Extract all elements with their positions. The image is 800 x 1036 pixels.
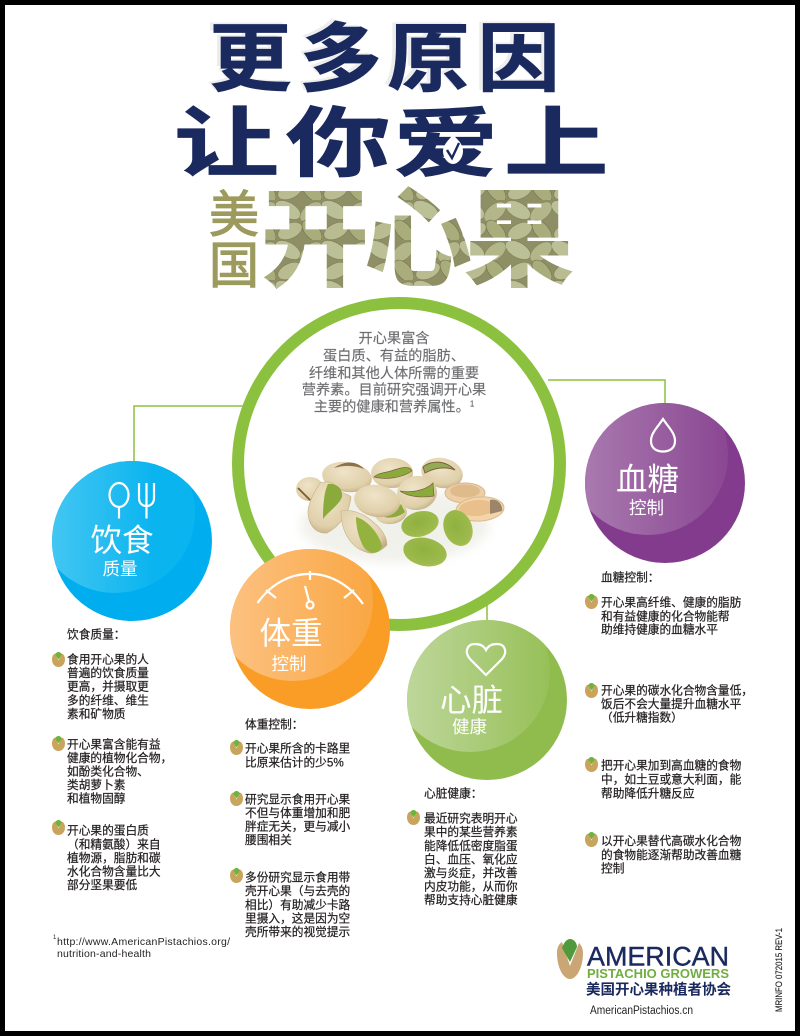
bullet item 2: [230, 791, 351, 847]
bullet item: 能降低低密度脂蛋: [424, 839, 518, 853]
bullet item 1: 和有益健康的化合物能帮: [601, 609, 730, 623]
print code: MRINFO 072015 REV-1: [774, 928, 785, 1012]
bullet item 3: 植物源，脂肪和碳: [67, 851, 161, 865]
icon: check badge on title: [443, 135, 463, 164]
shell H: [341, 510, 387, 553]
bullet item 1: 助维持健康的血糖水平: [601, 623, 718, 637]
text block: diet quality: 饮食质量：: [67, 627, 125, 641]
bullet item 1: [585, 594, 742, 637]
connector lines: [134, 380, 665, 621]
bullet item 1: 素和矿物质: [67, 707, 126, 721]
logo: American Pistachio Growers: AmericanPistachios.cn: [590, 1005, 693, 1017]
title: American: 国: [209, 238, 259, 294]
shell F: [352, 481, 402, 521]
bullet item: 最近研究表明开心: [424, 812, 518, 826]
circle: heart health: [407, 620, 567, 780]
icon: heart: [467, 644, 505, 675]
empty shell N: [455, 495, 505, 523]
bullet item 3: （和精氨酸）来自: [67, 837, 161, 851]
bullet item 4: 控制: [601, 861, 624, 875]
logo: American Pistachio Growers: 美国开心果种植者协会: [586, 980, 731, 998]
bullet item 3: 里摄入，这是因为空: [245, 911, 350, 925]
intro text: 1: [470, 400, 475, 408]
text block: heart health: [407, 786, 518, 907]
bullet item 3: 把开心果加到高血糖的食物: [601, 759, 742, 773]
footnote: [53, 935, 230, 960]
text block: diet quality: [52, 627, 172, 892]
bullet item 3: 多份研究显示食用带: [245, 871, 351, 885]
icon: spoon and fork: [110, 483, 154, 518]
shell I: [374, 500, 408, 526]
bullet item 2: （低升糖指数）: [601, 711, 683, 725]
label: blood sugar: 血糖: [616, 461, 679, 497]
bullet item 2: 类胡萝卜素: [67, 778, 126, 792]
text block: blood sugar control: [585, 571, 753, 875]
bullet item 2: 健康的植物化合物，: [67, 751, 172, 765]
logo: American Pistachio Growers: PISTACHIO GROWERS: [587, 967, 729, 981]
kernel L: [401, 534, 449, 570]
title: American: 美: [209, 187, 259, 243]
text block: blood sugar control: 血糖控制：: [601, 571, 659, 585]
kernel K: [438, 506, 478, 550]
bullet item 2: 腰围相关: [245, 833, 292, 847]
bullet item 1: 普遍的饮食质量: [67, 666, 149, 680]
bullet item 3: 壳所带来的视觉提示: [245, 925, 350, 939]
bullet item 1: 比原来估计的少5%: [245, 755, 344, 769]
icon: gauge: [258, 571, 363, 608]
label: health: 健康: [452, 717, 487, 737]
bullet item 3: 帮助降低升糖反应: [601, 786, 695, 800]
label: quality: 质量: [102, 559, 138, 579]
bullet item 1: 更高，并摄取更: [67, 680, 149, 694]
empty shell M: [445, 483, 485, 503]
shell G: [395, 473, 439, 513]
bullet item 4: 以开心果替代高碳水化合物: [601, 834, 742, 848]
intro text: [302, 330, 486, 416]
bullet item 3: 相比）有助减少卡路: [245, 898, 351, 912]
illustration: pistachios: [296, 454, 505, 570]
shell E: [308, 482, 351, 533]
circle: blood sugar control: [585, 403, 745, 563]
label: control: 控制: [629, 498, 664, 518]
footnote: nutrition-and-health: [57, 948, 151, 960]
bullet item 2: 研究显示食用开心果: [245, 792, 351, 806]
circle: weight control: [230, 549, 390, 709]
bullet item 2: 开心果富含能有益: [67, 737, 161, 751]
bullet item: 果中的某些营养素: [424, 825, 518, 839]
logo: American Pistachio Growers: [557, 939, 731, 1017]
title: more reasons to love: [174, 15, 609, 187]
bullet item: 帮助支持心脏健康: [424, 893, 518, 907]
bullet item 3: 部分坚果要低: [67, 878, 137, 892]
bullet item 1: 食用开心果的人: [67, 652, 149, 666]
shell B: [371, 458, 413, 488]
bullet item 2: 如酚类化合物、: [67, 764, 149, 778]
bullet item 3: [230, 868, 351, 939]
bullet item 2: 饭后不会大量提升血糖水平: [601, 697, 742, 711]
title: pistachio textured: 开心果: [262, 182, 572, 300]
title: American: [209, 187, 259, 294]
bullet item 1: 多的纤维、维生: [67, 693, 149, 707]
bullet item: [407, 810, 518, 907]
bullet item 3: 开心果的蛋白质: [67, 824, 149, 838]
text block: weight control: 体重控制：: [245, 717, 303, 731]
bullet item 2: 不但与体重增加和肥: [245, 806, 351, 820]
intro text: 纤维和其他人体所需的重要: [309, 366, 479, 382]
bullet item 3: [585, 757, 742, 800]
icon: drop: [651, 419, 675, 452]
bullet item 4: [585, 832, 742, 875]
text block: weight control: [230, 717, 351, 939]
bullet item 1: 开心果高纤维、健康的脂肪: [601, 596, 742, 610]
bullet item: 内皮功能，从而你: [424, 879, 518, 893]
title: more reasons to love: 更多原因: [209, 17, 560, 101]
bullet item 2: 胖症无关，更与减小: [245, 819, 351, 833]
label: weight: 体重: [259, 615, 323, 651]
title: more reasons to love: 让你爱上: [174, 102, 609, 187]
text block: heart health: 心脏健康：: [424, 786, 482, 800]
bullet item 3: 中，如土豆或意大利面，能: [601, 773, 742, 787]
bullet item: 白、血压、氧化应: [424, 852, 518, 866]
intro text: 营养素。目前研究强调开心果: [302, 382, 486, 398]
circle: diet quality: [52, 461, 212, 621]
bullet item 2: [585, 683, 753, 725]
logo: American Pistachio Growers: AMERICAN: [587, 942, 729, 972]
bullet item 1: [230, 740, 351, 769]
bullet item 2: 和植物固醇: [67, 792, 126, 806]
shell C: [418, 454, 466, 492]
bullet item 2: 开心果的碳水化合物含量低，: [601, 684, 753, 698]
intro text: 蛋白质、有益的脂肪、: [323, 348, 465, 364]
intro text: 主要的健康和营养属性。: [314, 400, 470, 416]
shell D: [296, 477, 324, 501]
kernel J: [398, 507, 442, 541]
bullet item 1: [52, 652, 149, 721]
footnote: 1: [53, 935, 57, 941]
intro text: 开心果富含: [359, 330, 429, 347]
bullet item 4: 的食物能逐渐帮助改善血糖: [601, 848, 742, 862]
label: heart: 心脏: [440, 682, 503, 718]
bullet item: 激与炎症，并改善: [424, 866, 518, 880]
label: control: 控制: [272, 654, 306, 674]
bullet item 3: [52, 820, 161, 892]
footnote: http://www.AmericanPistachios.org/: [57, 936, 230, 948]
shell A: [320, 459, 374, 495]
bullet item 1: 开心果所含的卡路里: [245, 742, 351, 756]
bullet item 3: 壳开心果（与去壳的: [245, 884, 350, 898]
label: diet: 饮食: [90, 522, 154, 558]
title: more reasons to love: 更多原因: [205, 15, 556, 99]
panel: central ring: [238, 303, 560, 625]
bullet item 3: 水化合物含量比大: [67, 864, 161, 878]
icon: logo leaf: [557, 939, 583, 979]
bullet item 2: [52, 736, 172, 806]
